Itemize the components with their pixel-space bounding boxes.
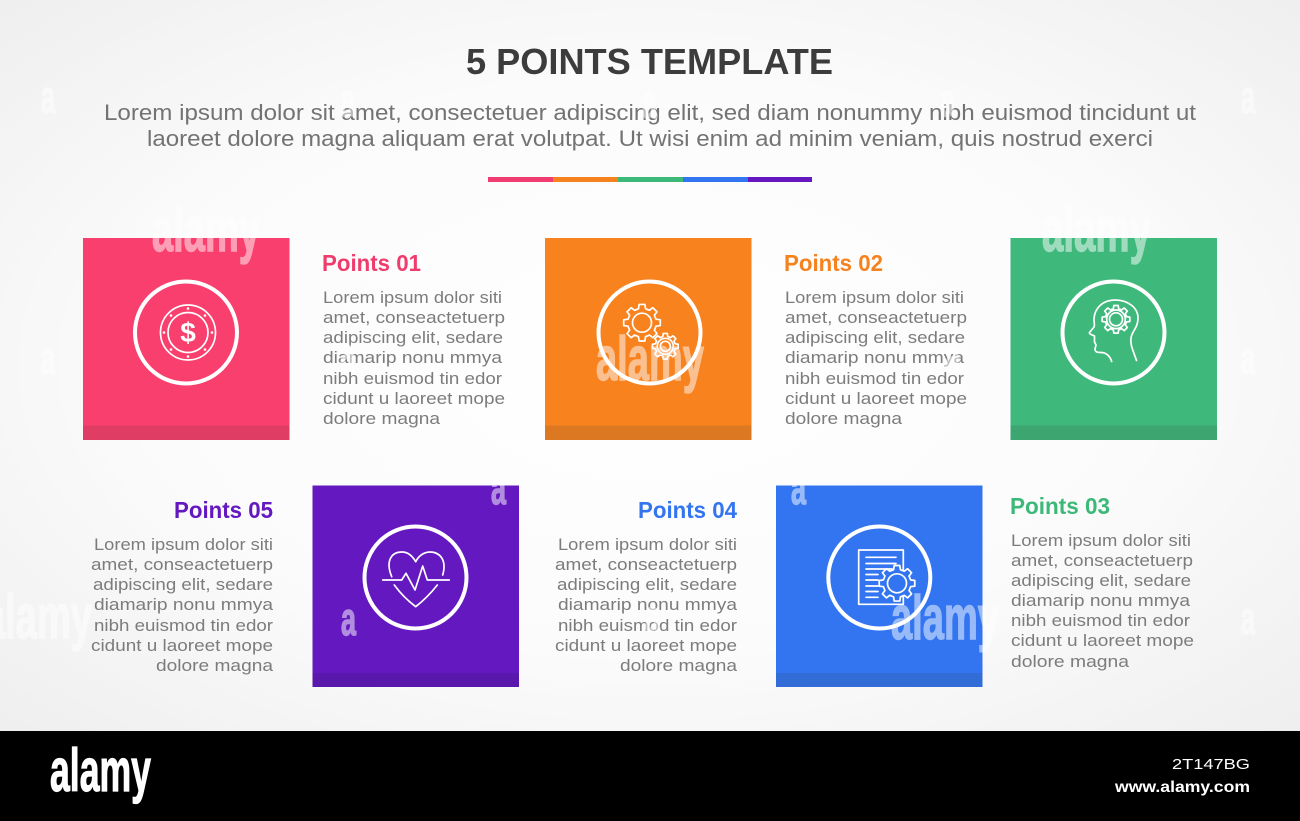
text block: Points 04 bbox=[555, 536, 738, 675]
text block: Points 02: cidunt u laoreet mope bbox=[785, 390, 967, 408]
watermark overlay: a bbox=[340, 74, 355, 126]
watermark overlay: alamy bbox=[1042, 196, 1151, 265]
icon: dollar coin bbox=[160, 305, 216, 360]
watermark overlay bbox=[0, 71, 1255, 653]
text block: Points 04: Lorem ipsum dolor siti bbox=[558, 536, 737, 554]
subtitle text: Lorem ipsum dolor sit amet, consectetuer adipiscing elit, sed diam nonummy nibh euismod tincidunt ut bbox=[104, 100, 1197, 125]
text block: Points 05: Lorem ipsum dolor siti bbox=[94, 536, 273, 554]
text block: Points 04: amet, conseactetuerp bbox=[555, 556, 737, 574]
text block: Points 02: amet, conseactetuerp bbox=[785, 309, 967, 327]
watermark overlay: a bbox=[41, 71, 55, 123]
subtitle text: laoreet dolore magna aliquam erat volutpat. Ut wisi enim ad minim veniam, quis nostrud exerci bbox=[147, 126, 1153, 151]
subtitle text bbox=[104, 100, 1197, 151]
text block: Points 01 bbox=[323, 289, 505, 428]
text block: Points 05: cidunt u laoreet mope bbox=[91, 637, 273, 655]
heading: Points 01: Points 01 bbox=[322, 250, 421, 276]
text block: Points 02 bbox=[785, 289, 967, 428]
colour divider bbox=[488, 177, 812, 182]
icon: heart with pulse bbox=[383, 552, 449, 607]
watermark overlay: alamy bbox=[596, 325, 704, 394]
text block: Points 05: diamarip nonu mmya bbox=[94, 596, 274, 614]
watermark overlay: a bbox=[1241, 71, 1255, 123]
text block: Points 02: nibh euismod tin edor bbox=[785, 370, 965, 388]
watermark overlay: a bbox=[945, 330, 960, 382]
text block: Points 02: dolore magna bbox=[785, 410, 903, 428]
watermark overlay: a bbox=[41, 332, 55, 384]
text block: Points 02: Lorem ipsum dolor siti bbox=[785, 289, 964, 307]
heading: Points 05: Points 05 bbox=[174, 497, 273, 523]
text block: Points 04: nibh euismod tin edor bbox=[558, 617, 738, 635]
text block: Points 05: adipiscing elit, sedare bbox=[93, 576, 273, 594]
heading: Points 03: Points 03 bbox=[1010, 493, 1110, 519]
text block: Points 03: cidunt u laoreet mope bbox=[1011, 632, 1194, 650]
watermark overlay: a bbox=[341, 593, 356, 645]
text block: Points 04: dolore magna bbox=[620, 657, 738, 675]
watermark overlay: a bbox=[642, 76, 657, 128]
watermark overlay: a bbox=[645, 590, 660, 642]
footer logo: alamy bbox=[50, 737, 151, 804]
icon: two gears bbox=[624, 304, 678, 359]
text block: Points 02: diamarip nonu mmya bbox=[785, 349, 965, 367]
watermark overlay: a bbox=[791, 462, 806, 514]
text block: Points 04: adipiscing elit, sedare bbox=[557, 576, 737, 594]
text block: Points 05: amet, conseactetuerp bbox=[91, 556, 273, 574]
watermark overlay: a bbox=[340, 328, 355, 380]
text block: Points 03: dolore magna bbox=[1011, 653, 1130, 671]
watermark overlay: a bbox=[1241, 592, 1255, 644]
watermark overlay: a bbox=[491, 462, 506, 514]
text block: Points 03: Lorem ipsum dolor siti bbox=[1011, 532, 1191, 550]
title: 5 POINTS TEMPLATE bbox=[466, 41, 833, 82]
text block: Points 03: nibh euismod tin edor bbox=[1011, 612, 1191, 630]
panel: point 03 square bbox=[1010, 238, 1217, 440]
text block: Points 05: dolore magna bbox=[156, 657, 274, 675]
text block: Points 04: diamarip nonu mmya bbox=[558, 596, 738, 614]
heading: Points 04: Points 04 bbox=[638, 497, 737, 523]
text block: Points 03: adipiscing elit, sedare bbox=[1011, 572, 1191, 590]
image id: 2T147BG bbox=[1172, 757, 1250, 773]
panel: point 02 square bbox=[545, 238, 752, 440]
heading: Points 02: Points 02 bbox=[784, 250, 883, 276]
watermark overlay: alamy bbox=[152, 196, 260, 265]
watermark overlay: a bbox=[1241, 332, 1255, 384]
text block: Points 01: dolore magna bbox=[323, 410, 441, 428]
panel: point 05 square bbox=[312, 486, 519, 687]
text block: Points 01: Lorem ipsum dolor siti bbox=[323, 289, 502, 307]
text block: Points 03 bbox=[1011, 532, 1194, 671]
icon: head with gear bbox=[1089, 300, 1138, 362]
text block: Points 01: diamarip nonu mmya bbox=[323, 349, 503, 367]
text block: Points 05: nibh euismod tin edor bbox=[94, 617, 274, 635]
text block: Points 05 bbox=[91, 536, 274, 675]
watermark overlay: alamy bbox=[891, 584, 999, 653]
text block: Points 01: cidunt u laoreet mope bbox=[323, 390, 505, 408]
text block: Points 02: adipiscing elit, sedare bbox=[785, 329, 965, 347]
footer url: www.alamy.com bbox=[1114, 779, 1250, 796]
watermark overlay: a bbox=[940, 74, 955, 126]
text block: Points 03: diamarip nonu mmya bbox=[1011, 592, 1191, 610]
text block: Points 03: amet, conseactetuerp bbox=[1011, 552, 1193, 570]
panel: point 04 square bbox=[776, 486, 982, 687]
footer bar bbox=[0, 731, 1300, 821]
text block: Points 01: amet, conseactetuerp bbox=[323, 309, 505, 327]
text block: Points 04: cidunt u laoreet mope bbox=[555, 637, 737, 655]
text block: Points 01: adipiscing elit, sedare bbox=[323, 329, 503, 347]
panel: point 01 square bbox=[83, 238, 290, 440]
icon: document with gear bbox=[859, 550, 915, 604]
icon: dollar coin: $ bbox=[180, 317, 196, 348]
text block: Points 01: nibh euismod tin edor bbox=[323, 370, 503, 388]
